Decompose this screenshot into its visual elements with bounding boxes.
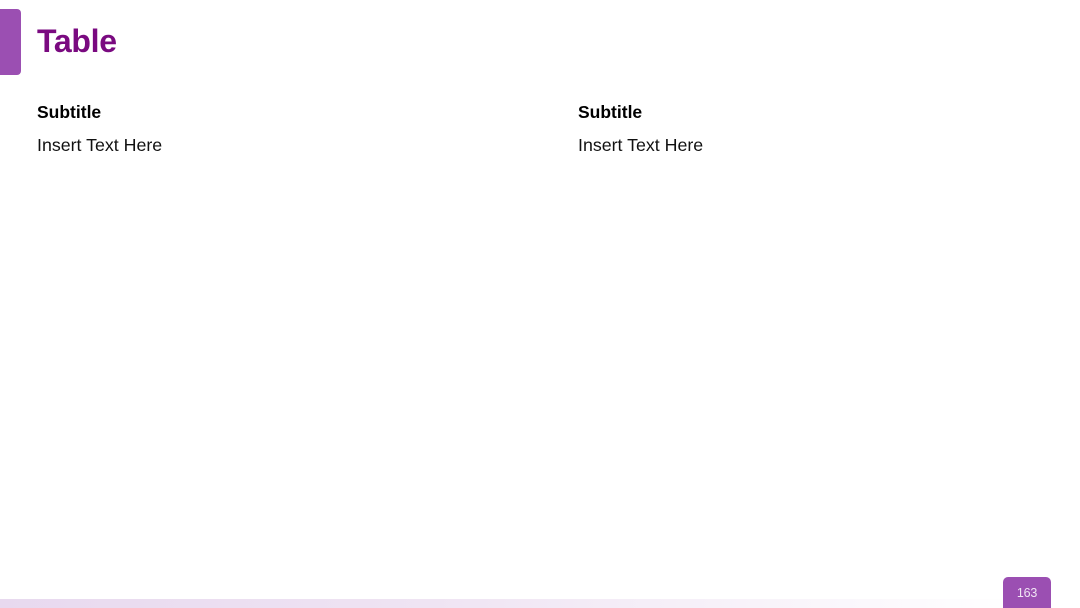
footer gradient bar: [0, 599, 1080, 608]
right body text: Insert Text Here: [578, 135, 703, 155]
accent tab: [0, 9, 21, 75]
page number badge: [1003, 577, 1051, 608]
title: Table: [37, 23, 117, 59]
left body text: Insert Text Here: [37, 135, 162, 155]
right subtitle: Subtitle: [578, 102, 642, 122]
page number: 163: [1017, 586, 1037, 600]
left subtitle: Subtitle: [37, 102, 101, 122]
